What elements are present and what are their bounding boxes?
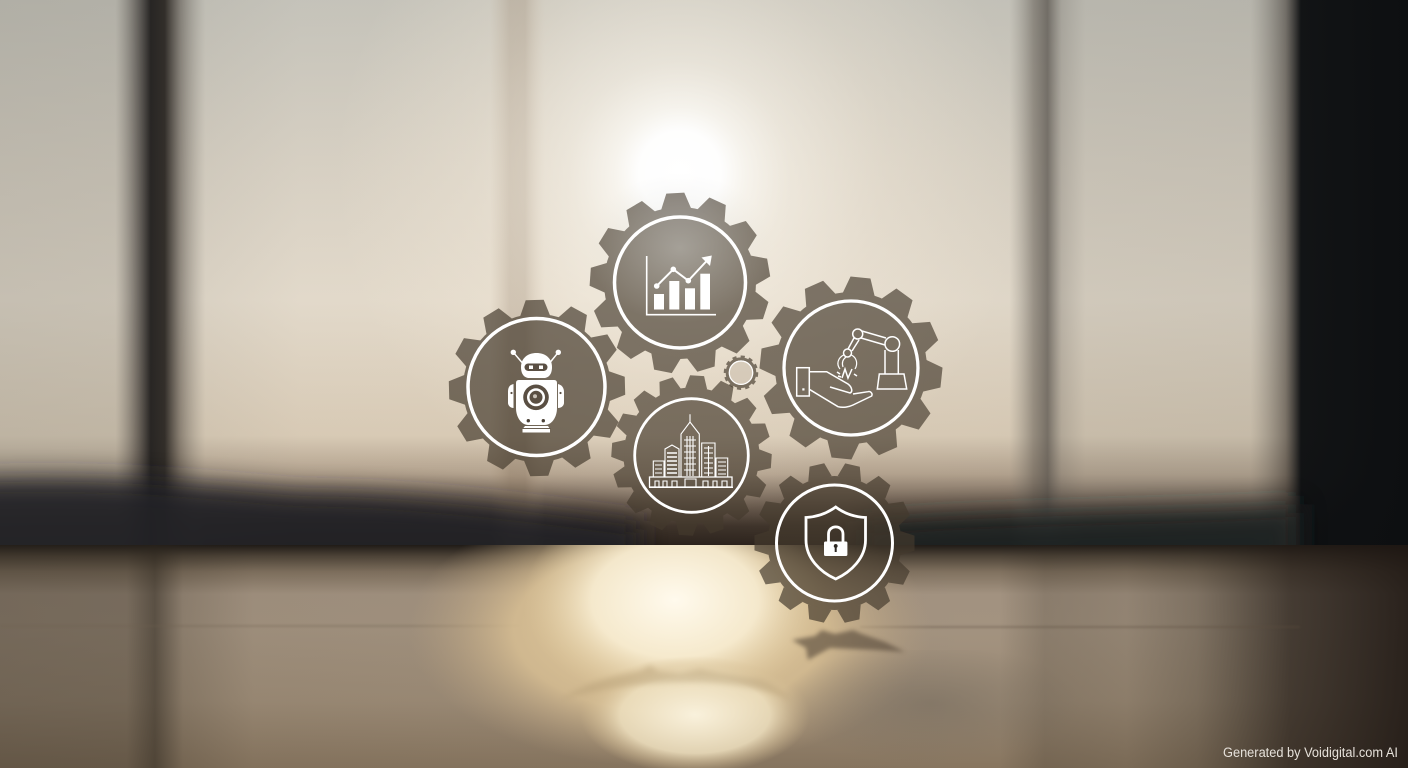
shoulder: [853, 329, 863, 339]
gear: city: [611, 375, 772, 536]
antennas: [513, 352, 558, 362]
small gear ring: [729, 361, 753, 384]
gear: security shield: [754, 462, 915, 624]
icon: bar chart with rising arrow: [647, 256, 716, 315]
lock shackle: [828, 527, 843, 542]
elbow: [885, 337, 900, 351]
warm light spread: [432, 545, 909, 754]
reflected gear crest: [579, 665, 780, 695]
icon: shield with padlock: [806, 507, 866, 579]
icon: robot: [508, 350, 564, 432]
back wall: [0, 0, 1408, 545]
shield: [806, 507, 866, 579]
gear body: [759, 276, 943, 460]
rivets: [527, 419, 530, 422]
icon: city skyline: [649, 414, 733, 487]
hand: [809, 372, 852, 393]
white ring: [468, 318, 605, 456]
small gear teeth: [726, 357, 756, 388]
sun glow: [300, 0, 1060, 517]
gear shadow star: [792, 630, 905, 660]
speaker: [523, 384, 549, 410]
lower sunlight reflection: [590, 660, 802, 768]
white ring: [635, 399, 748, 512]
gear: robot arm and hand: [759, 276, 943, 460]
sparks: [837, 369, 857, 378]
watermark: Generated by Voidigital.com AI: [1223, 745, 1398, 760]
low horizon band right: [860, 504, 1300, 575]
white ring: [614, 217, 746, 348]
glow over gear: [588, 173, 772, 323]
cast shadow on floor: [815, 664, 1016, 734]
floor base: [0, 545, 1408, 768]
gear: robot: [449, 300, 625, 476]
arm base: [877, 374, 907, 389]
window frames and panes: [0, 0, 1408, 545]
base: [522, 426, 550, 432]
gear body: [449, 300, 625, 476]
gear body: [589, 192, 771, 374]
low horizon band left: [0, 477, 640, 575]
white ring: [776, 485, 892, 601]
arms: [508, 384, 514, 408]
keyhole: [834, 544, 838, 552]
cuff: [797, 368, 809, 396]
body: [516, 380, 557, 425]
claw: [844, 349, 852, 357]
white ring: [784, 301, 918, 435]
floor: [0, 545, 1408, 768]
gear body: [754, 462, 915, 624]
arm column: [885, 350, 898, 374]
icon: robot arm over open hand: [797, 329, 907, 407]
gear body: [611, 375, 772, 536]
lock body: [824, 542, 847, 556]
sunlight pool: [544, 545, 806, 676]
floor column shading: [0, 545, 1408, 768]
floor seam right: [860, 626, 1300, 628]
floor seam left: [226, 625, 431, 627]
gear: growth chart: [588, 173, 772, 374]
small gear: [726, 357, 756, 388]
head: [521, 353, 552, 378]
